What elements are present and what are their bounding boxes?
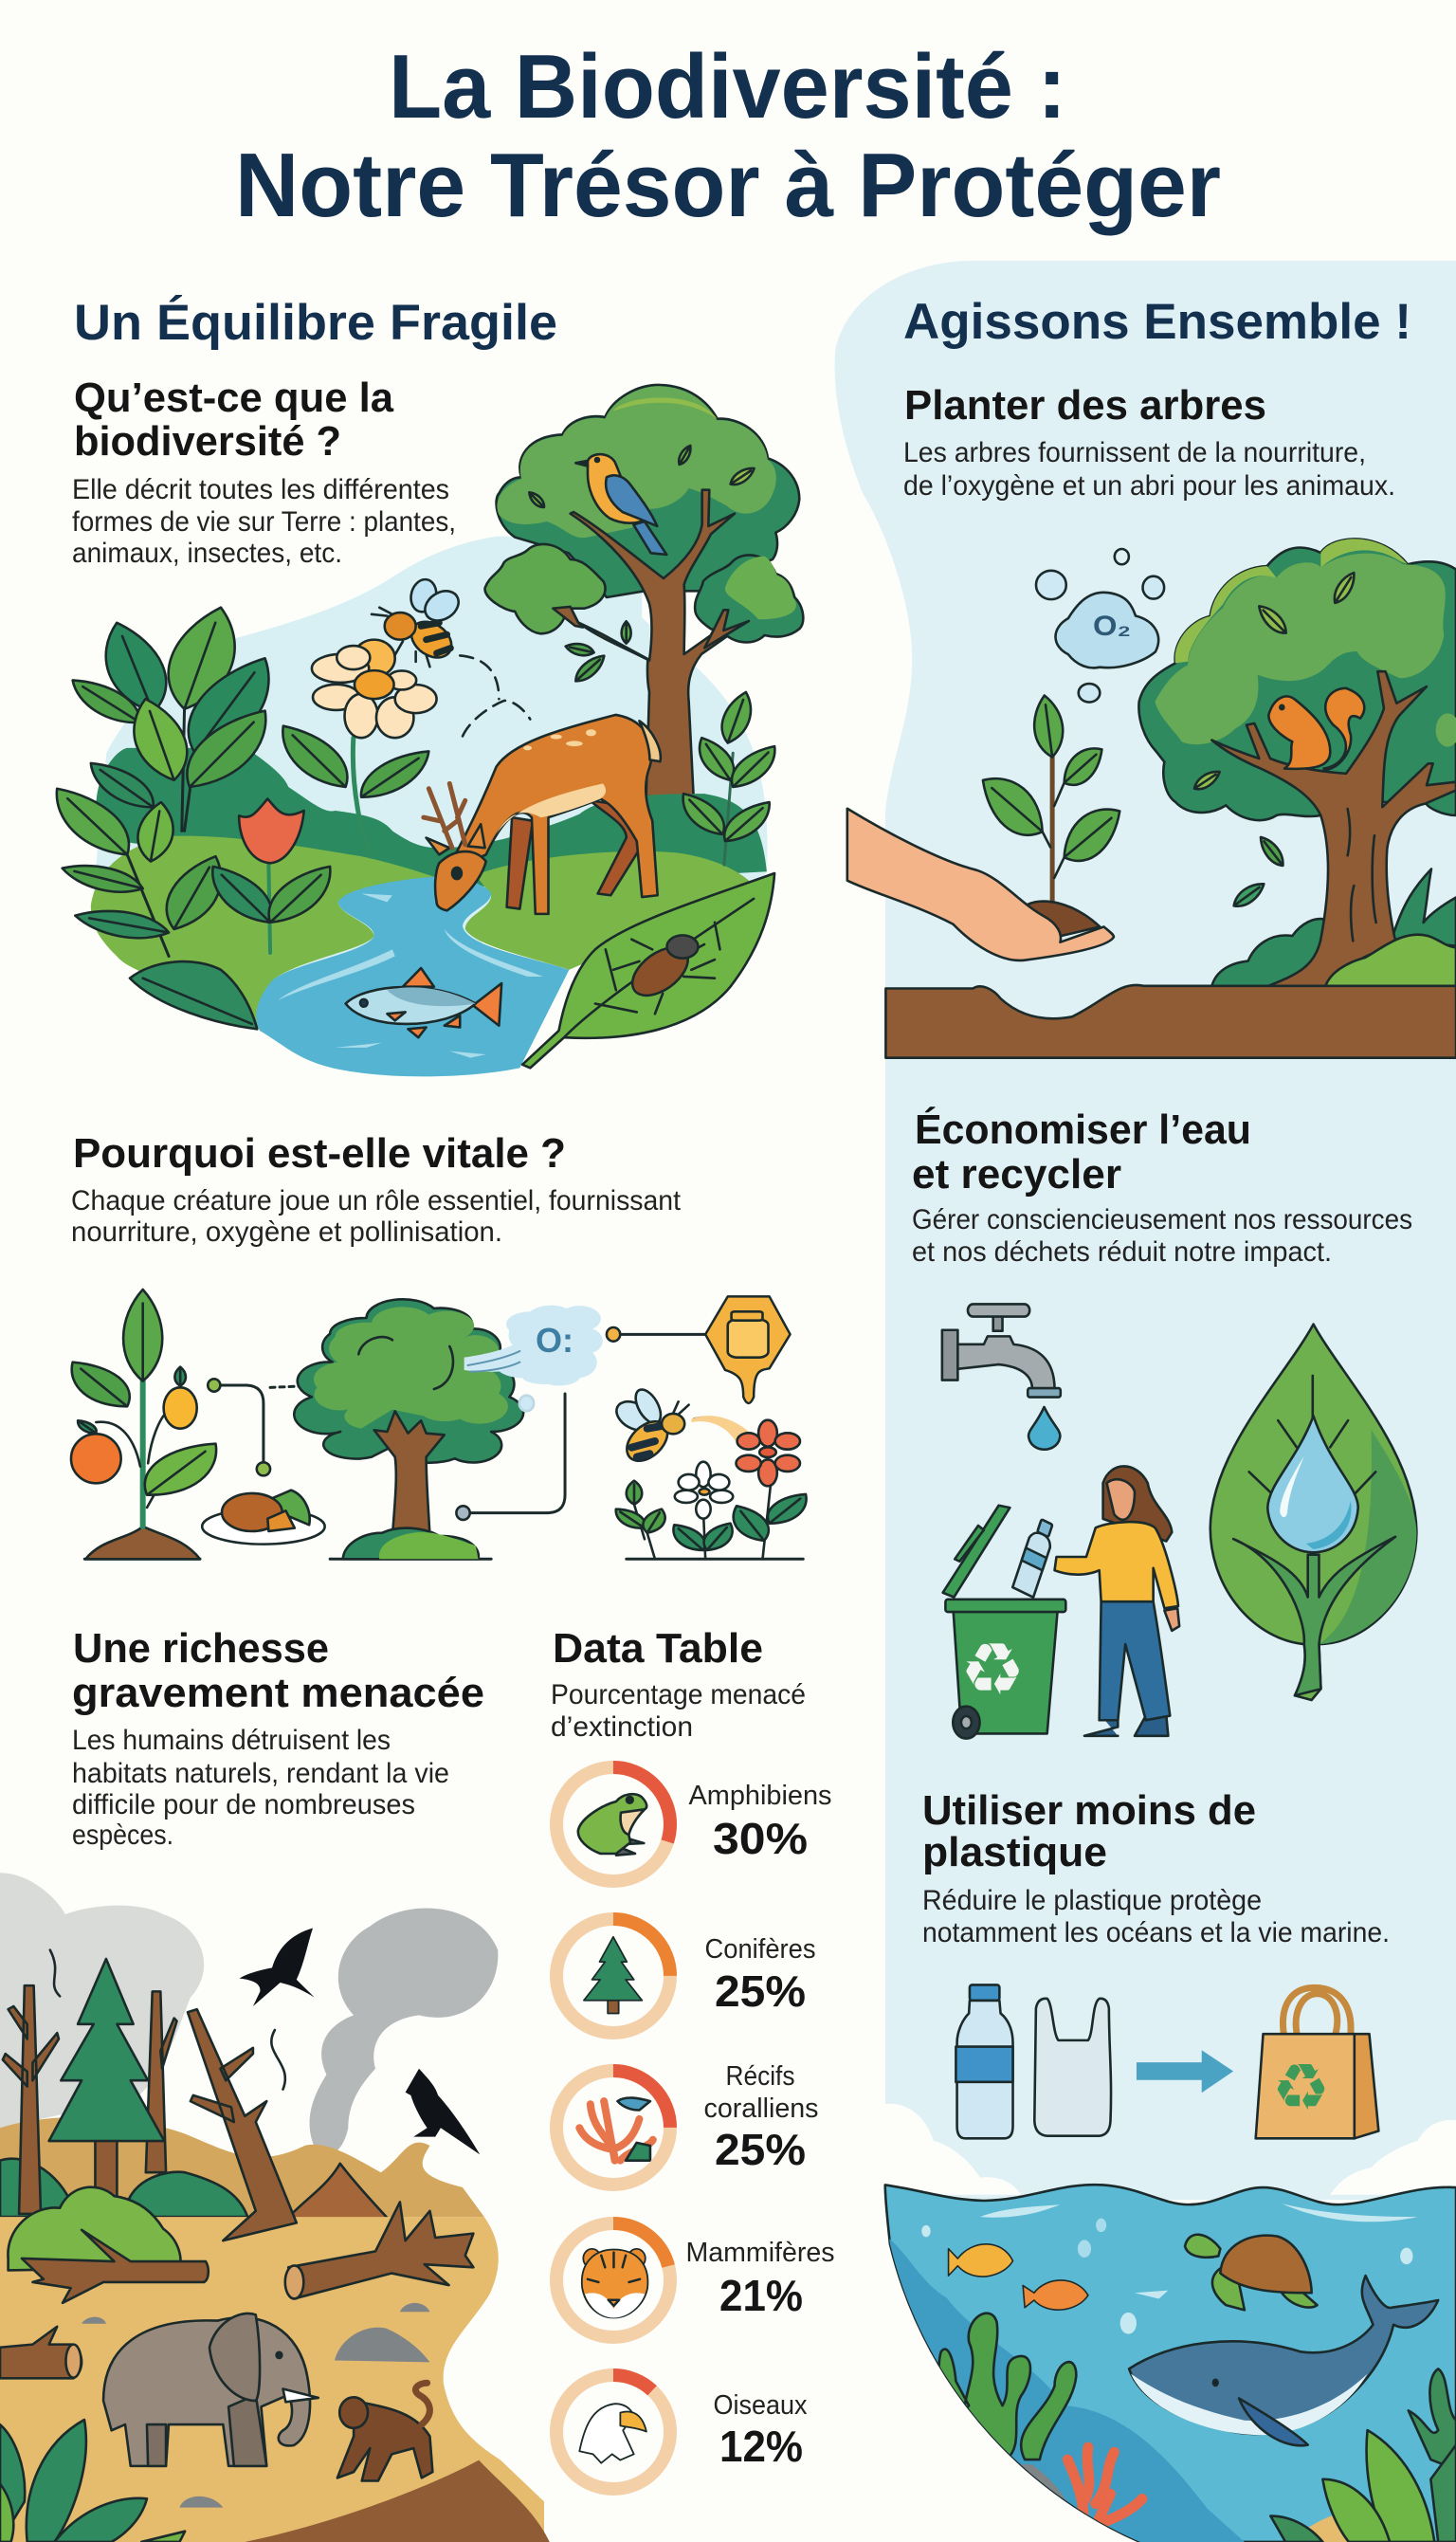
arrow: [1137, 2050, 1233, 2093]
ocean interior: [872, 2204, 1456, 2542]
metric: Amphibiens 30%: 30%: [713, 1814, 808, 1863]
text block: Qu'est-ce que la biodiversité: [72, 375, 456, 569]
chart: threatened species donuts: [556, 1767, 834, 2489]
text block: Économiser l'eau: Gérer consciencieusement nos ressources: [912, 1204, 1412, 1235]
icon: recycling symbol on bin: ♻: [960, 1627, 1025, 1711]
bee and pollen: [610, 1388, 754, 1464]
tree with bird: [485, 385, 803, 796]
text block: Une richesse gravement menacée: espèces.: [72, 1820, 173, 1851]
text block: Une richesse gravement menacée: gravement menacée: [72, 1670, 484, 1716]
text block: data table heading: Pourcentage menacé: [551, 1679, 806, 1710]
heading: Un Équilibre Fragile: Un Équilibre Fragile: [74, 294, 557, 351]
text block: Utiliser moins de plastique: plastique: [922, 1829, 1107, 1875]
label: O2: O₂: [1093, 611, 1131, 642]
front bush: [1325, 935, 1456, 986]
back hill: [0, 2117, 484, 2217]
text block: Économiser l'eau: Économiser l’eau: [915, 1106, 1251, 1153]
fish: [346, 968, 501, 1037]
text block: Planter des arbres: [903, 382, 1395, 502]
text block: Planter des arbres: Planter des arbres: [904, 382, 1266, 429]
bird: [575, 454, 666, 555]
text block: Une richesse gravement menacée: Une richesse: [73, 1625, 329, 1672]
pollination path: [460, 655, 530, 736]
text block: Qu'est-ce que la biodiversité: biodiversité ?: [74, 418, 341, 465]
leaves on branches: [622, 621, 631, 644]
text block: Utiliser moins de plastique: Utiliser moins de: [922, 1787, 1256, 1834]
ground: [885, 985, 1456, 1058]
text block: Utiliser moins de plastique: notamment les océans et la vie marine.: [922, 1917, 1390, 1948]
text block: Économiser l'eau: et nos déchets réduit notre impact.: [912, 1236, 1332, 1268]
seedling: [974, 693, 1128, 904]
panel: action background: [835, 261, 1456, 2200]
sky blob: [91, 537, 768, 990]
metric: Récifs coralliens 25%: coralliens: [703, 2094, 819, 2124]
metric: Récifs coralliens 25%: [556, 2061, 819, 2185]
logs: [0, 2202, 473, 2378]
text block: Économiser l'eau: [912, 1106, 1412, 1268]
wisps: [50, 1950, 285, 2090]
seabed rock: [1020, 2464, 1065, 2501]
metric: Oiseaux 12%: Oiseaux: [713, 2390, 808, 2421]
text block: Pourquoi est-elle vitale: [71, 1130, 682, 1248]
oxygen bubbles: [1036, 549, 1164, 703]
leaf with drop: [1210, 1325, 1416, 1700]
deep water band: [872, 2234, 1245, 2542]
text block: Une richesse gravement menacée: difficile pour de nombreuses: [72, 1789, 415, 1820]
text block: Une richesse gravement menacée: [72, 1625, 484, 1851]
label: oxygen symbol: O:: [536, 1321, 573, 1360]
fruit plant: [55, 1289, 803, 1559]
metric: Oiseaux 12%: 12%: [719, 2422, 803, 2471]
flowers: [609, 1420, 817, 1559]
soil: [1025, 902, 1100, 937]
right meadow: [465, 851, 754, 970]
left meadow: [91, 836, 434, 1031]
metric: Conifères 25%: 25%: [715, 1966, 806, 2016]
stump: [282, 2164, 389, 2222]
icon: eagle: [579, 2404, 646, 2463]
river: [256, 877, 569, 1076]
turtle: [1185, 2235, 1318, 2310]
smoke left: [0, 1873, 204, 2128]
title: Notre Trésor à Protéger: [235, 135, 1221, 236]
connector: fruit to meal: [208, 1379, 309, 1475]
bee: [372, 578, 464, 667]
icon: frog: [578, 1794, 646, 1856]
bushes back: [0, 2159, 247, 2217]
faucet: [942, 1304, 1061, 1450]
left small canopy: [485, 544, 605, 633]
metric: Amphibiens 30%: Amphibiens: [688, 1781, 832, 1811]
forest backdrop: [96, 748, 767, 888]
text block: Pourquoi est-elle vitale: Pourquoi est-elle vitale ?: [73, 1130, 566, 1177]
metric: Conifères 25%: Conifères: [705, 1934, 815, 1965]
illustration: planting trees: [847, 539, 1456, 1058]
paper bag: [1256, 1987, 1378, 2138]
icon: tiger: [582, 2249, 647, 2317]
orange fish: [949, 2244, 1088, 2310]
metric: Récifs coralliens 25%: 25%: [715, 2125, 806, 2174]
text block: data table heading: [551, 1625, 806, 1743]
text block: Utiliser moins de plastique: Réduire le plastique protège: [922, 1885, 1262, 1916]
text block: Pourquoi est-elle vitale: nourriture, oxygène et pollinisation.: [71, 1216, 502, 1248]
illustration: ecosystem scene: [38, 385, 803, 1076]
flying bird: [240, 1928, 315, 2006]
central tree: [294, 1299, 523, 1559]
connector: honey: [607, 1327, 704, 1342]
text block: Une richesse gravement menacée: Les humains détruisent les: [72, 1725, 391, 1756]
beetle: [613, 935, 715, 1014]
metric: Amphibiens 30%: [556, 1767, 832, 1881]
text block: Pourquoi est-elle vitale: Chaque créature joue un rôle essentiel, fournissant: [71, 1185, 682, 1216]
metric: Conifères 25%: [556, 1919, 815, 2033]
text block: data table heading: d’extinction: [551, 1711, 693, 1743]
text block: Qu'est-ce que la biodiversité: Elle décrit toutes les différentes: [72, 474, 449, 505]
big leaf with beetle: [522, 873, 774, 1068]
elephant: [103, 2313, 318, 2466]
seaweed: [939, 2313, 1076, 2460]
text block: Qu'est-ce que la biodiversité: formes de vie sur Terre : plantes,: [72, 506, 456, 538]
coral: [1067, 2447, 1142, 2542]
perched bird: [406, 2069, 480, 2154]
ground bottom: [245, 2460, 550, 2542]
trunk: [553, 490, 749, 796]
canopy: [1138, 539, 1456, 820]
whale: [1129, 2276, 1438, 2445]
honey hexagon: [705, 1296, 791, 1403]
trunk: [1211, 671, 1456, 988]
text block: data table heading: Data Table: [553, 1625, 763, 1672]
back bushes: [1211, 869, 1456, 986]
red tulip: [196, 798, 347, 953]
leaves: [1192, 569, 1359, 911]
text block: Une richesse gravement menacée: habitats naturels, rendant la vie: [72, 1758, 449, 1789]
bottom leaf: [130, 961, 257, 1029]
daisy flower: [265, 640, 443, 856]
metric: Mammifères 21%: [556, 2223, 834, 2337]
illustration: habitat destruction: [0, 1873, 653, 2542]
ground: [0, 2217, 544, 2542]
illustration: plastic and ocean: [872, 1984, 1456, 2542]
text block: Utiliser moins de plastique: [922, 1787, 1390, 1948]
title: La Biodiversité :: [389, 36, 1066, 137]
right lobe: [1436, 713, 1456, 747]
text block: Planter des arbres: Les arbres fournissent de la nourriture,: [903, 437, 1366, 468]
icon: recycling symbol on paper bag: ♻: [1272, 2051, 1330, 2126]
falling tree: [188, 2009, 297, 2240]
rocks: [82, 2303, 429, 2508]
squirrel: [1268, 688, 1364, 770]
person: [1055, 1466, 1179, 1736]
foreground leaves: [0, 2420, 185, 2542]
oxygen cloud: [464, 1306, 603, 1411]
front bush: [8, 2187, 180, 2270]
ocean: [885, 2185, 1456, 2542]
title: [235, 36, 1221, 236]
plastic bottle: [956, 1984, 1013, 2138]
icon: conifer: [584, 1937, 642, 2014]
heading: Agissons Ensemble: Agissons Ensemble !: [903, 294, 1411, 350]
text block: Qu'est-ce que la biodiversité: animaux, insectes, etc.: [72, 538, 342, 569]
plant leaves: [1367, 2430, 1434, 2542]
bottle: [1012, 1517, 1057, 1598]
dead trees and pine: [3, 1959, 177, 2214]
right small canopy: [695, 555, 803, 642]
meal plate: [202, 1490, 325, 1545]
metric: Récifs coralliens 25%: Récifs: [726, 2061, 794, 2092]
text block: Planter des arbres: de l’oxygène et un abri pour les animaux.: [903, 470, 1395, 502]
icon: coral reef: [579, 2098, 653, 2161]
text block: Qu'est-ce que la biodiversité: Qu’est-ce que la: [74, 375, 394, 421]
big tree with squirrel: [1138, 539, 1456, 988]
hand: [847, 809, 1114, 960]
main canopy: [497, 385, 799, 597]
metric: Mammifères 21%: 21%: [719, 2271, 803, 2320]
text block: Économiser l'eau: et recycler: [912, 1151, 1121, 1198]
diagram: vital services: [55, 1289, 817, 1559]
monkey: [337, 2383, 432, 2481]
connector: oxygen to tree: [456, 1394, 565, 1520]
clouds: [885, 2104, 1456, 2195]
metric: Oiseaux 12%: [556, 2375, 808, 2489]
deer: [424, 715, 661, 914]
left foliage: [38, 603, 293, 957]
plastic bag: [1034, 1999, 1111, 2136]
right plant: [671, 690, 787, 865]
metric: Mammifères 21%: Mammifères: [686, 2238, 834, 2268]
recycling bin: [943, 1506, 1065, 1739]
smoke right: [310, 1908, 498, 2155]
illustration: water and recycling: [942, 1304, 1416, 1739]
